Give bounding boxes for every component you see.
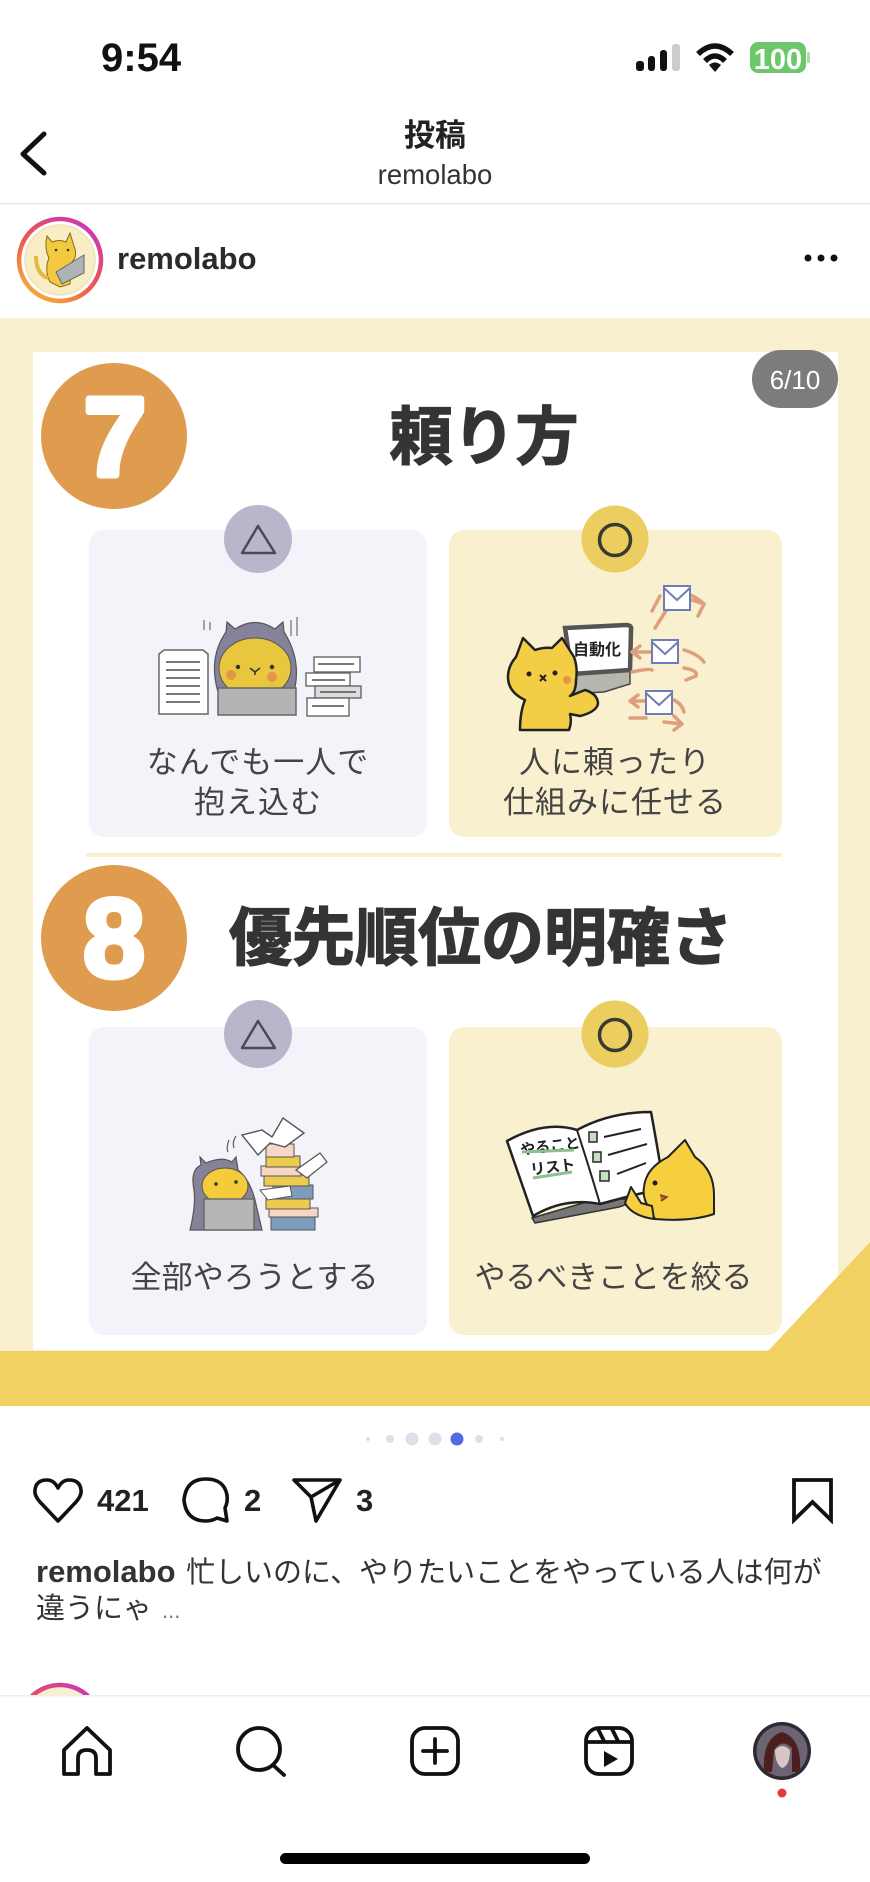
icon: battery: 100 <box>754 44 802 76</box>
icon: wifi <box>698 46 732 72</box>
label: やるべきことを絞る <box>474 1252 754 1297</box>
icon: search <box>238 1728 284 1775</box>
next post avatar peek <box>19 1685 101 1767</box>
label: 抱え込む <box>194 777 322 822</box>
caption <box>36 1554 822 1625</box>
heading: 頼り方: 頼り方 <box>390 387 578 478</box>
status bar <box>101 36 810 80</box>
icon: circle <box>582 1000 648 1068</box>
icon: home <box>64 1728 110 1774</box>
number badge 7 <box>41 363 187 509</box>
notification dot <box>778 1788 786 1798</box>
icon: triangle <box>224 505 292 573</box>
panel: bad example <box>89 505 427 837</box>
icon: send <box>294 1480 340 1521</box>
illustration: cat with book pile <box>190 1118 327 1230</box>
icon: triangle <box>224 1000 292 1068</box>
home indicator <box>280 1853 590 1864</box>
illustration: cat reading to-do list: やること <box>519 1135 581 1159</box>
caption: 忙しいのに、やりたいことをやっている人は何が <box>186 1556 822 1589</box>
icon: comment <box>184 1479 227 1521</box>
icon: bookmark <box>794 1480 831 1520</box>
header title: 投稿 <box>404 118 466 153</box>
icon: create <box>412 1728 458 1774</box>
section 7 <box>41 363 782 837</box>
illustration: automation cat: 自動化 <box>573 640 621 659</box>
label: 全部やろうとする <box>130 1252 380 1297</box>
label: 人に頼ったり <box>519 737 711 782</box>
illustration: cat reading to-do list <box>507 1112 714 1223</box>
panel: good example <box>449 506 782 837</box>
label: なんでも一人で <box>147 737 369 782</box>
share count: 3 <box>356 1483 373 1518</box>
icon: signal <box>636 44 680 71</box>
illustration: automation cat <box>508 586 704 730</box>
icon: reels <box>586 1728 632 1774</box>
caption: remolabo <box>36 1554 176 1589</box>
profile avatar <box>753 1722 811 1780</box>
slide counter badge: 6/10 <box>770 365 820 395</box>
action row <box>35 1479 831 1521</box>
heading: 優先順位の明確さ: 優先順位の明確さ <box>229 888 733 979</box>
comment count: 2 <box>244 1483 261 1518</box>
panel: bad example <box>89 1000 427 1335</box>
header subtitle: remolabo <box>378 159 492 190</box>
icon: circle <box>582 506 648 572</box>
like count: 421 <box>97 1483 149 1518</box>
clock: 9:54 <box>101 36 182 80</box>
username: remolabo <box>117 241 257 276</box>
avatar <box>19 219 101 301</box>
slide counter badge <box>752 350 838 408</box>
profile row <box>19 219 838 301</box>
section 8 <box>41 865 782 1335</box>
number badge 8: 8 <box>83 876 145 1001</box>
panel: good example <box>449 1000 782 1335</box>
white panel <box>33 352 838 1350</box>
number badge 7: 7 <box>84 376 146 499</box>
icon: more dots <box>804 254 838 262</box>
navigation header <box>23 118 492 190</box>
caption: ... <box>162 1598 180 1623</box>
number badge 8 <box>41 865 187 1011</box>
illustration: overwhelmed cat <box>159 617 361 716</box>
bottom navigation <box>64 1722 811 1798</box>
icon: back chevron <box>23 134 44 173</box>
label: 仕組みに任せる <box>503 777 727 822</box>
illustration: cat reading to-do list: リスト <box>529 1157 576 1179</box>
caption: 違うにゃ <box>36 1592 152 1625</box>
icon: heart <box>35 1480 81 1521</box>
post image slide <box>0 318 870 1406</box>
yellow bottom band <box>0 1242 870 1406</box>
carousel dots <box>366 1432 504 1446</box>
